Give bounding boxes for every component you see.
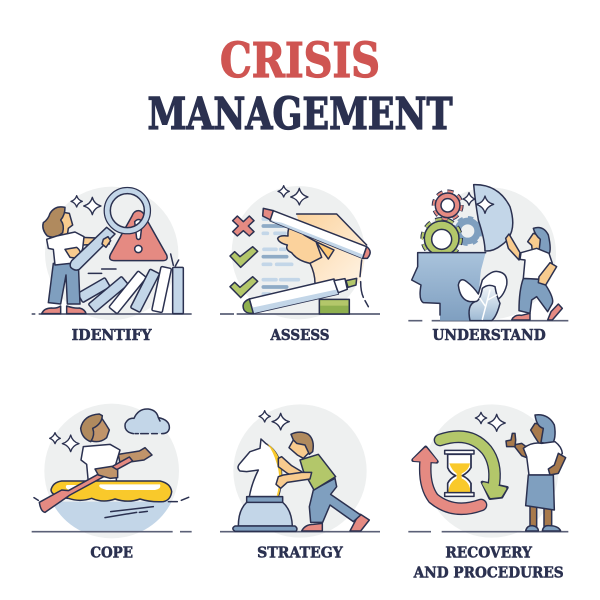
icon: cloud <box>125 409 169 434</box>
icon: checks <box>230 247 258 298</box>
icon: sparkles <box>71 196 101 215</box>
icon: magnifier <box>70 188 150 270</box>
icon: sparkles <box>278 186 308 205</box>
icon: opening head dome <box>474 185 513 251</box>
hand <box>278 214 367 283</box>
person: woman with magnifier <box>42 207 109 314</box>
label: RECOVERY <box>445 544 532 562</box>
icon: sparkles <box>475 412 505 431</box>
label: STRATEGY <box>257 544 343 562</box>
panel: recovery and procedures <box>408 404 568 582</box>
label: IDENTIFY <box>72 326 152 344</box>
title: MANAGEMENT <box>148 89 453 140</box>
panel: assess <box>220 186 380 344</box>
plant <box>458 271 507 321</box>
marker: red <box>263 208 370 258</box>
icon: hourglass <box>445 450 474 496</box>
title <box>148 33 453 140</box>
eraser <box>319 299 349 314</box>
icon: red gear <box>434 192 461 219</box>
icon: blue gear <box>454 218 481 244</box>
hand on paddle <box>95 466 118 478</box>
icon: sparkles <box>463 193 494 213</box>
person: woman lifting dome <box>506 227 562 320</box>
label <box>413 544 564 582</box>
person: man pushing knight <box>276 432 369 531</box>
chess knight <box>233 439 297 531</box>
raft <box>51 481 172 502</box>
dominoes <box>77 254 183 314</box>
arrow: red <box>413 448 481 509</box>
label: AND PROCEDURES <box>413 564 564 582</box>
panel: identify <box>32 187 192 344</box>
person: rower <box>81 414 152 482</box>
label: UNDERSTAND <box>432 326 546 344</box>
dashed wrist line <box>360 260 368 307</box>
icon: warning triangle <box>110 211 167 261</box>
icon: sparkles <box>50 433 79 452</box>
arrow: green <box>440 437 507 498</box>
label: COPE <box>90 544 133 562</box>
panel: understand <box>408 185 568 344</box>
panel: strategy <box>220 404 380 562</box>
marker: green <box>243 278 357 313</box>
panel: cope <box>32 404 192 562</box>
paddle <box>39 457 133 512</box>
document lines <box>263 219 298 294</box>
person: woman thumbs up <box>506 415 566 531</box>
label: ASSESS <box>270 326 329 344</box>
icon: sparkles <box>259 411 289 430</box>
icon: green gear <box>423 220 460 257</box>
icon: cross <box>233 216 254 236</box>
title: CRISIS <box>220 33 380 89</box>
head <box>412 253 486 321</box>
water lines <box>34 497 189 518</box>
